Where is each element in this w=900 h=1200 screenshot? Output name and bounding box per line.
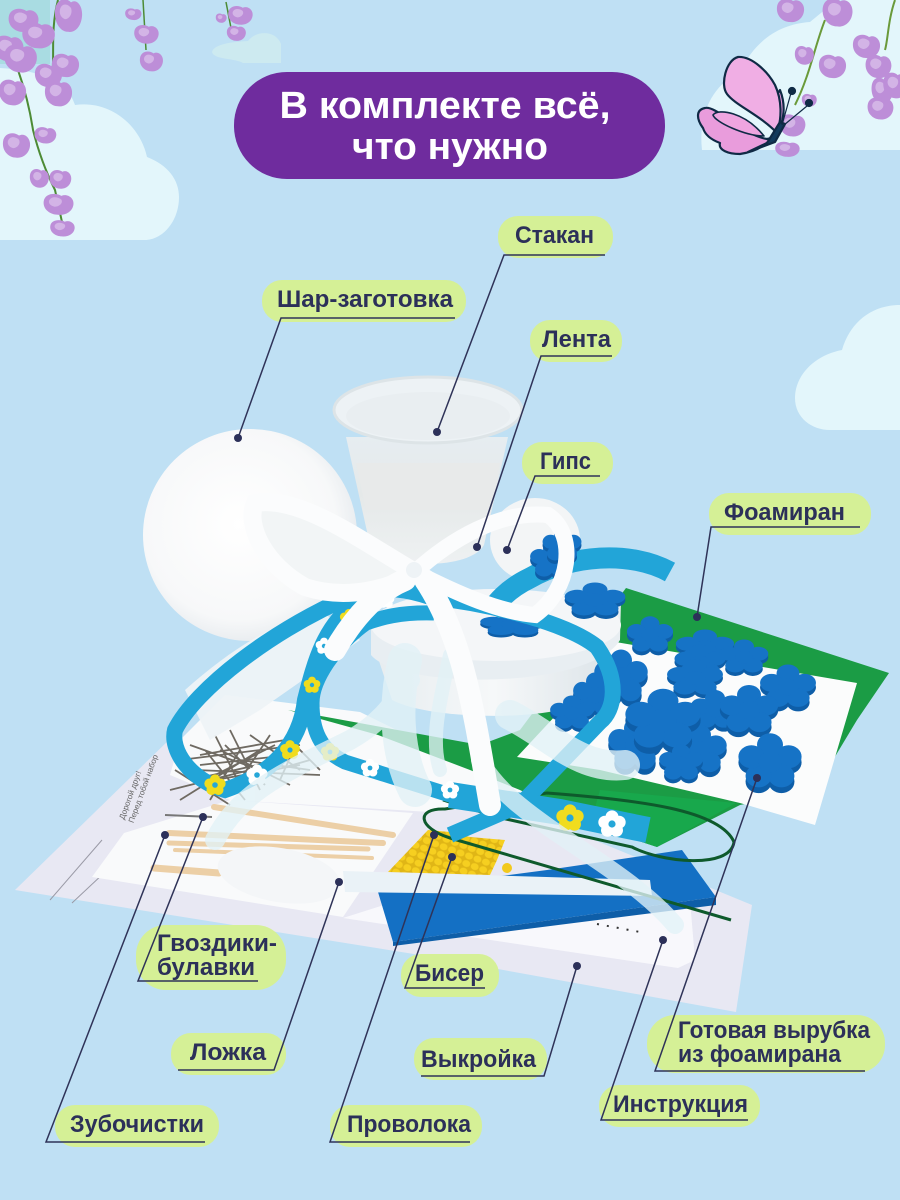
translucent ribbon left <box>185 610 360 740</box>
label: Готовая вырубка из фоамирана: из фоамирана <box>678 1041 842 1068</box>
label: Проволока: Проволока <box>347 1111 472 1138</box>
title text: В комплекте всё, <box>280 85 610 127</box>
label: Инструкция <box>599 936 760 1127</box>
foam flowers on jar <box>480 582 625 638</box>
label: Зубочистки: Зубочистки <box>70 1111 204 1138</box>
cloud: right <box>795 305 900 430</box>
white foam backing <box>517 640 857 825</box>
label: Гвоздики-булавки <box>136 813 286 990</box>
toothpicks <box>154 807 393 873</box>
label: Гвоздики-булавки: булавки <box>157 954 255 981</box>
label: Инструкция: Инструкция <box>613 1091 748 1118</box>
white satin bow <box>252 502 567 805</box>
plaster jar <box>371 498 621 716</box>
wisteria: top left branch <box>0 0 82 237</box>
letter text: Перед тобой набор <box>127 753 160 824</box>
label: Лента <box>473 320 622 551</box>
single pin <box>165 815 212 817</box>
label: Готовая вырубка из фоамирана: Готовая вырубка <box>678 1017 871 1044</box>
label: Бисер: Бисер <box>415 960 484 987</box>
plastic cup <box>334 377 522 564</box>
label: Бисер <box>401 853 499 997</box>
blue ribbon <box>174 558 670 837</box>
wisteria: top right branches <box>775 0 900 157</box>
beads <box>388 830 512 875</box>
label: Лента: Лента <box>542 326 612 353</box>
label: Стакан <box>433 216 613 436</box>
title pill: что нужно <box>352 126 548 168</box>
green foam sheets <box>288 588 889 847</box>
cloud: small top <box>212 33 281 63</box>
label: Шар-заготовка: Шар-заготовка <box>277 286 454 313</box>
wisteria: top middle branch <box>125 0 163 71</box>
cloud: top right <box>701 0 900 150</box>
foam flower pile <box>550 616 816 793</box>
label: Выкройка: Выкройка <box>421 1046 537 1073</box>
letter text: Дорогой друг! <box>117 770 143 821</box>
icon: butterfly <box>698 57 812 154</box>
title pill <box>234 72 665 179</box>
organza ribbon <box>215 655 675 925</box>
pattern sheet <box>15 737 752 1012</box>
label: Гипс <box>503 442 613 554</box>
label: Гвоздики-булавки: Гвоздики- <box>157 930 277 957</box>
label: Проволока <box>330 831 482 1147</box>
label: Выкройка <box>414 962 581 1080</box>
cloud: top left <box>0 68 179 240</box>
white tray <box>92 800 413 917</box>
wire <box>424 793 734 920</box>
instruction sheet <box>343 900 695 968</box>
label: Зубочистки <box>46 831 219 1147</box>
label: Стакан: Стакан <box>515 222 594 249</box>
label: Фоамиран <box>693 493 871 621</box>
foam flowers stack behind bow loop <box>530 528 581 580</box>
white backing sheet left <box>170 695 530 812</box>
label: Фоамиран: Фоамиран <box>724 499 845 526</box>
label: Ложка: Ложка <box>190 1039 267 1066</box>
label: Ложка <box>171 878 343 1075</box>
white spoon <box>213 838 652 912</box>
label: Шар-заготовка <box>234 280 466 442</box>
label: Готовая вырубка из фоамирана <box>647 774 885 1073</box>
nails <box>170 730 320 805</box>
blue foam sheets <box>378 850 716 946</box>
label: Гипс: Гипс <box>540 448 591 475</box>
wisteria: top third branch <box>216 2 253 41</box>
styrofoam ball <box>143 429 357 641</box>
